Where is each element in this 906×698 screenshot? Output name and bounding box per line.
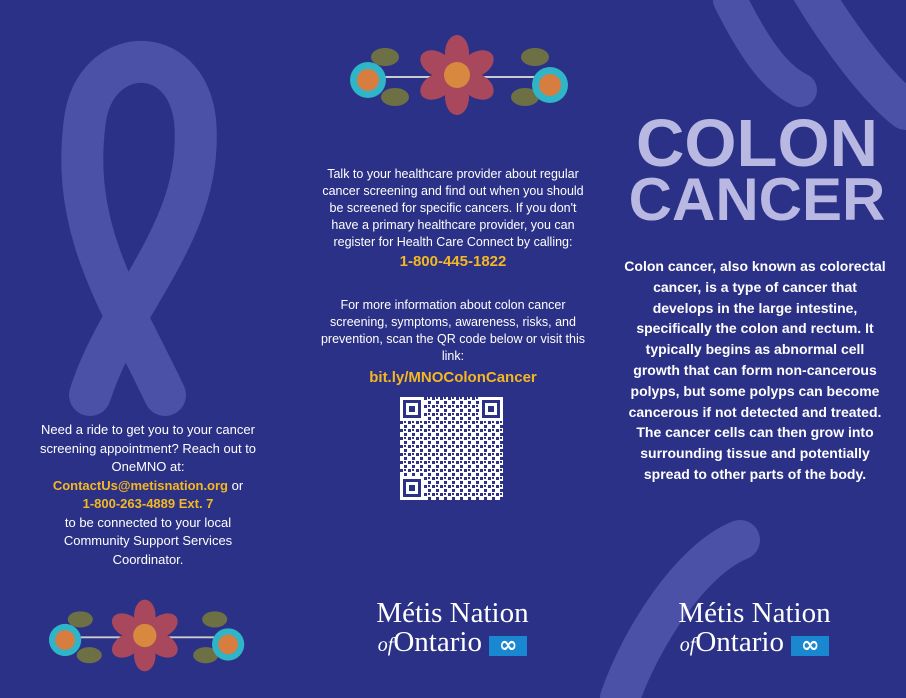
title: CANCER (629, 166, 885, 233)
title: COLON (636, 106, 878, 181)
left text block (40, 422, 256, 566)
logo right: ∞ (801, 633, 819, 658)
logo right: Métis Nation (678, 597, 831, 629)
middle text block: Talk to your healthcare provider about regular cancer screening and find out when you should be screened for specific cancers. If you don't have a primary healthcare provider, you can register for Health Care Connect by calling: (322, 167, 584, 249)
title (629, 106, 885, 233)
logo right: ofOntario (680, 626, 784, 658)
logo middle: ∞ (499, 633, 517, 658)
right description: Colon cancer, also known as colorectal cancer, is a type of cancer that develops in the large intestine, specifically the colon and rectum. It typically begins as abnormal cell growth that can form non-cancerous polyps, but some polyps can become cancerous if not detected and treated. The cancer cells can then grow into surrounding tissue and potentially spread to other parts of the body. (624, 258, 886, 482)
left text block: Community Support Services Coordinator. (64, 533, 232, 566)
left text block: Need a ride to get you to your cancer screening appointment? Reach out to OneMNO at: (40, 422, 256, 474)
middle info text: bit.ly/MNOColonCancer (369, 369, 537, 386)
middle info text: For more information about colon cancer screening, symptoms, awareness, risks, and prevention, scan the QR code below or visit this link: (321, 298, 585, 363)
middle text block: 1-800-445-1822 (400, 253, 506, 270)
logo right (678, 597, 831, 658)
QR code (400, 397, 503, 500)
left text block: 1-800-263-4889 Ext. 7 (83, 496, 213, 511)
left text block: ContactUs@metisnation.org or (53, 478, 243, 492)
flower bottom (49, 600, 244, 672)
logo middle: Métis Nation (376, 597, 529, 629)
flower top (350, 35, 568, 115)
left text block: to be connected to your local (65, 514, 231, 530)
logo middle (376, 597, 529, 658)
logo middle: ofOntario (378, 626, 482, 658)
